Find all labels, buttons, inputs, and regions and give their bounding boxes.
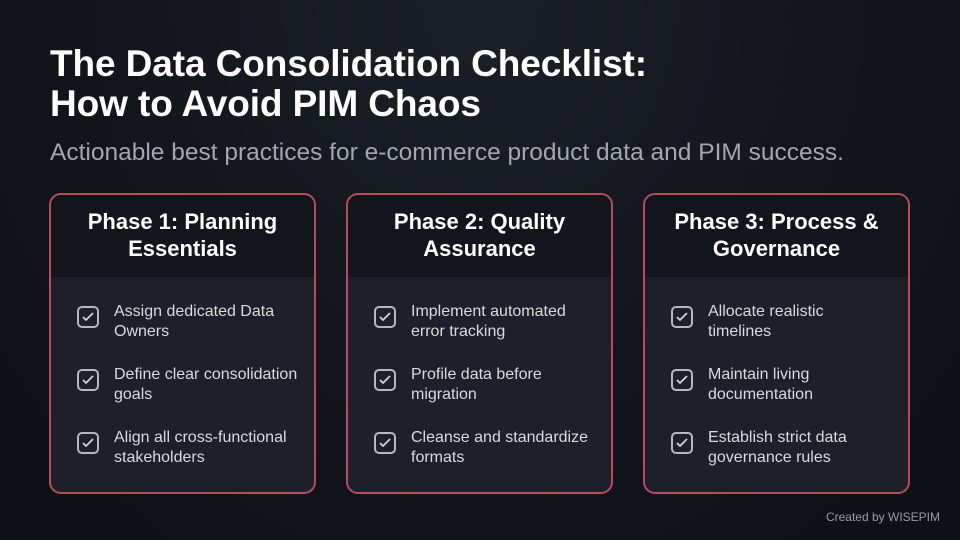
item 2: Define clear consolidation xyxy=(114,366,297,383)
item 1: Owners xyxy=(114,323,169,340)
item 3 xyxy=(77,429,287,466)
item 1: Implement automated xyxy=(411,303,566,320)
item 1 xyxy=(77,303,274,340)
item 1 xyxy=(374,303,566,340)
heading: phase 3: Governance xyxy=(713,236,840,261)
heading: phase 1: Essentials xyxy=(128,236,237,261)
item 1: Allocate realistic xyxy=(708,303,824,320)
title xyxy=(50,43,647,124)
item 3 xyxy=(374,429,588,466)
item 3 xyxy=(671,429,847,466)
item 1: timelines xyxy=(708,323,771,340)
subtitle: Actionable best practices for e-commerce product data and PIM success. xyxy=(50,139,844,166)
item 3: Align all cross-functional xyxy=(114,429,287,446)
item 2: goals xyxy=(114,386,152,403)
item 3: stakeholders xyxy=(114,449,205,466)
item 3: governance rules xyxy=(708,449,831,466)
item 2: documentation xyxy=(708,386,813,403)
item 3: formats xyxy=(411,449,464,466)
heading: phase 3 xyxy=(645,195,908,277)
title: How to Avoid PIM Chaos xyxy=(50,83,481,124)
item 2 xyxy=(374,366,542,403)
panel: phase 3 xyxy=(643,193,910,494)
item 2: migration xyxy=(411,386,477,403)
heading: phase 3: Phase 3: Process & xyxy=(674,209,879,234)
item 3: Establish strict data xyxy=(708,429,847,446)
item 1: error tracking xyxy=(411,323,505,340)
heading: phase 1 xyxy=(51,195,314,277)
item 2: Maintain living xyxy=(708,366,809,383)
heading: phase 2: Phase 2: Quality xyxy=(394,209,565,234)
heading: phase 1: Phase 1: Planning xyxy=(88,209,277,234)
title: The Data Consolidation Checklist: xyxy=(50,43,647,84)
heading: phase 2 xyxy=(348,195,611,277)
heading: phase 2: Assurance xyxy=(423,236,536,261)
item 2: Profile data before xyxy=(411,366,542,383)
item 1: Assign dedicated Data xyxy=(114,303,274,320)
panel: phase 2 xyxy=(346,193,613,494)
item 2 xyxy=(671,366,813,403)
footer credit: Created by WISEPIM xyxy=(826,510,940,524)
item 2 xyxy=(77,366,297,403)
panel: phase 1 xyxy=(49,193,316,494)
item 3: Cleanse and standardize xyxy=(411,429,588,446)
item 1 xyxy=(671,303,824,340)
